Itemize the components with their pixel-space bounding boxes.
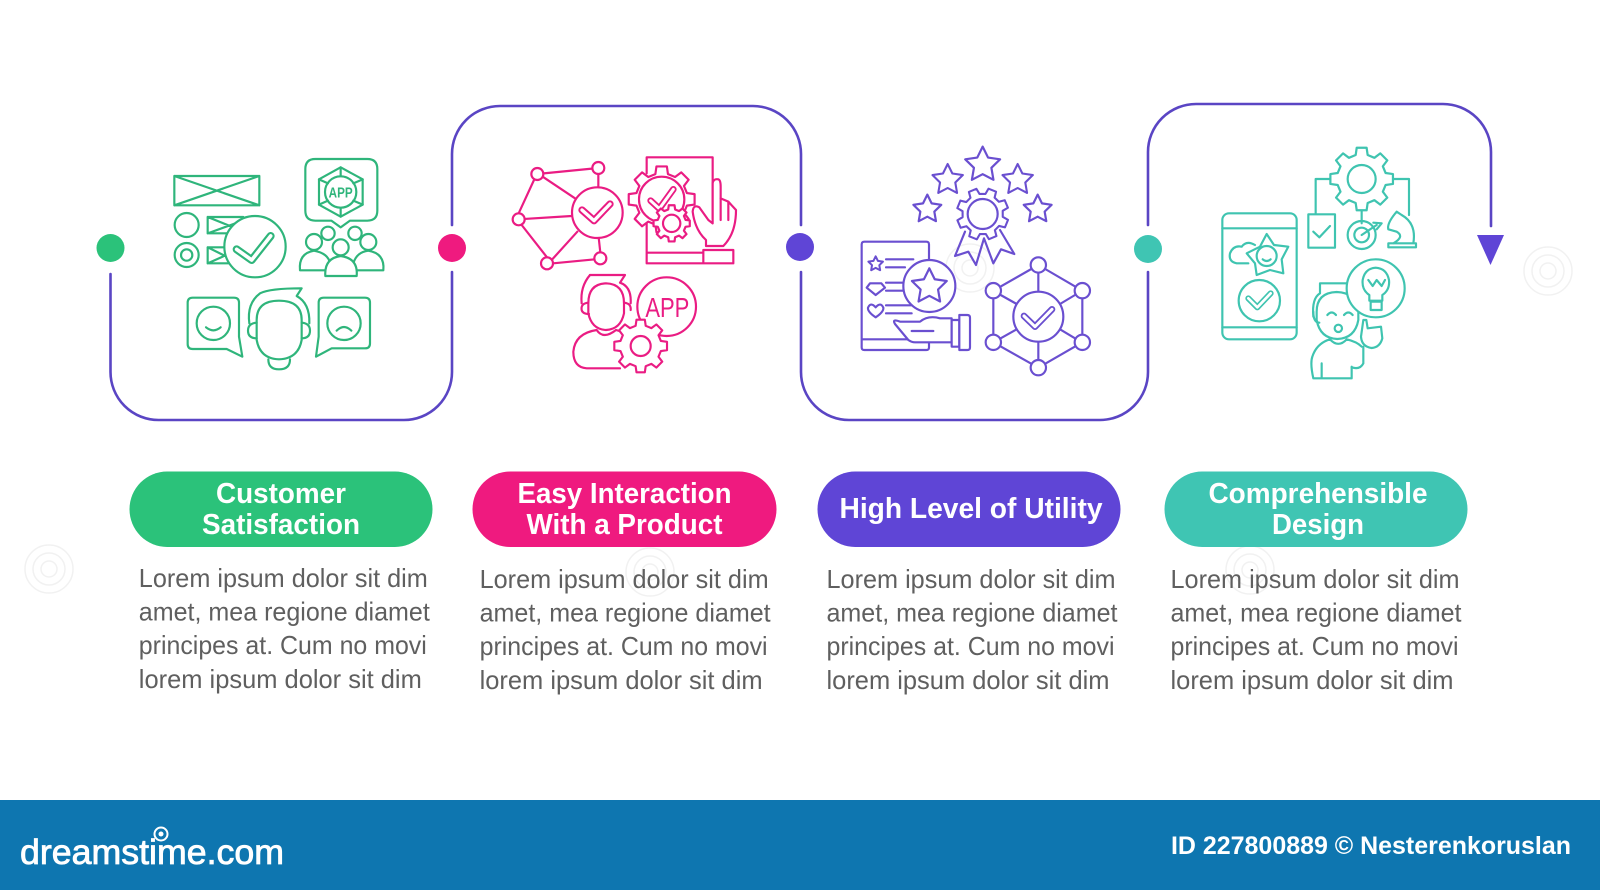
footer banner: [0, 800, 1600, 890]
timeline dot: teal: [1134, 235, 1162, 263]
timeline dot: green: [96, 234, 124, 262]
text block: column 3: Lorem ipsum dolor sit dim: [826, 564, 1116, 594]
text block: column 4: lorem ipsum dolor sit dim: [1170, 665, 1454, 695]
logo: dreamstime: dreamstime.com: [20, 833, 284, 872]
pill: Easy Interaction With a Product: [472, 472, 776, 547]
icon label: APP: APP: [329, 185, 353, 201]
pill: Easy Interaction With a Product: With a Product: [526, 509, 723, 541]
arrowhead: [1477, 235, 1504, 265]
text block: column 4: principes at. Cum no movi: [1170, 631, 1458, 661]
watermark spirals: [25, 244, 1572, 596]
text block: column 1: amet, mea regione diamet: [139, 596, 431, 626]
text block: column 2: [480, 564, 771, 695]
pill: Comprehensible Design: Comprehensible: [1208, 478, 1428, 510]
pill: Customer Satisfaction: Satisfaction: [202, 509, 360, 541]
text block: column 4: amet, mea regione diamet: [1170, 598, 1462, 628]
pill: High Level of Utility: High Level of Utility: [840, 493, 1102, 525]
text block: column 2: amet, mea regione diamet: [480, 598, 771, 628]
pill: Customer Satisfaction: [130, 472, 432, 547]
text block: column 4: Lorem ipsum dolor sit dim: [1170, 564, 1460, 594]
timeline dot: pink: [438, 234, 466, 262]
connector path: [110, 104, 1491, 420]
image credit: ID 227800889 © Nesterenkoruslan: [1171, 832, 1571, 860]
text block: column 1: [139, 563, 431, 694]
icon: customer satisfaction: [174, 159, 383, 369]
pill: Easy Interaction With a Product: Easy Interaction: [518, 478, 732, 510]
pill: Customer Satisfaction: Customer: [216, 478, 346, 510]
icon label: APP: APP: [645, 292, 689, 323]
pill: Comprehensible Design: [1164, 472, 1468, 547]
timeline dot: purple: [786, 233, 814, 261]
text block: column 1: Lorem ipsum dolor sit dim: [139, 563, 428, 593]
text block: column 3: principes at. Cum no movi: [826, 631, 1114, 661]
text block: column 1: principes at. Cum no movi: [139, 630, 427, 660]
pill: Comprehensible Design: Design: [1272, 509, 1364, 541]
text block: column 4: [1170, 564, 1462, 695]
text block: column 2: lorem ipsum dolor sit dim: [480, 665, 763, 695]
text block: column 1: lorem ipsum dolor sit dim: [139, 664, 422, 694]
text block: column 3: amet, mea regione diamet: [826, 598, 1118, 628]
text block: column 2: principes at. Cum no movi: [480, 631, 768, 661]
text block: column 2: Lorem ipsum dolor sit dim: [480, 564, 769, 594]
text block: column 3: [826, 564, 1118, 695]
icon: comprehensible design: [1222, 148, 1416, 378]
pill: High Level of Utility: [818, 472, 1120, 547]
icon: high level of utility: [862, 147, 1090, 375]
icon: easy interaction with a product: [513, 157, 736, 372]
text block: column 3: lorem ipsum dolor sit dim: [826, 665, 1110, 695]
